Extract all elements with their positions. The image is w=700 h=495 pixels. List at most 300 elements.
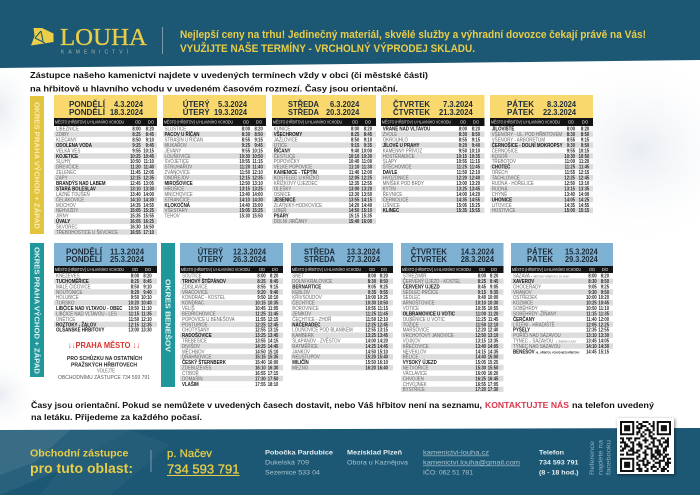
sales rep name and phone: p. Načev <box>167 448 213 460</box>
table: Pondělí 4.3. / 18.3.: 8:00 <box>132 126 141 132</box>
table: Čtvrtek 14.3. / 28.3.: NETVOŘICE <box>403 363 429 372</box>
table: Úterý 5.3. / 19.3.: MĚSTO (HŘBITOV) U HLAVNÍHO VCHODU <box>164 120 233 124</box>
table: Středa 13.3. / 27.3.: KAMBERK <box>292 333 315 339</box>
table: Středa 13.3. / 27.3.: LOUŇOVICE POD BLANÍKEM <box>292 326 353 334</box>
table: Čtvrtek 14.3. / 28.3.: 16:25 <box>475 376 486 381</box>
table: Pátek 15.3. / 29.3.: 12:05 <box>586 322 597 327</box>
table: Úterý 5.3. / 19.3.: TEHOV <box>164 213 180 220</box>
table: Úterý 12.3. / 26.3.: POSTUPICE <box>182 322 208 328</box>
table: Středa 13.3. / 27.3. <box>291 243 393 372</box>
table: Úterý 12.3. / 26.3.: 15:10 <box>268 349 279 354</box>
table: Pátek 8.3. / 22.3.: MĚSTO (HŘBITOV) U HLAVNÍHO VCHODU <box>491 120 560 124</box>
table: Středa 6.3. / 20.3.: 13:55 <box>349 197 360 202</box>
table: Pátek 15.3. / 29.3.: 14:10 <box>586 344 597 349</box>
table: Pondělí 11.3. / 25.3.: 11:50 <box>129 316 139 322</box>
table: Úterý 5.3. / 19.3.: ÚTERÝ <box>183 108 210 117</box>
table: Středa 13.3. / 27.3.: 11:25 <box>366 311 376 317</box>
table: Čtvrtek 14.3. / 28.3.: ARNOŠTOVICE <box>403 299 435 307</box>
table: Pondělí 4.3. / 18.3.: 9:55 <box>132 148 141 153</box>
table: Úterý 12.3. / 26.3.: 8:00 <box>257 273 266 279</box>
table: Úterý 12.3. / 26.3.: 15:35 <box>268 354 279 360</box>
table: Úterý 12.3. / 26.3.: 16:55 <box>255 371 266 376</box>
table: Pondělí 4.3. / 18.3.: ČELÁKOVICE <box>56 196 85 204</box>
table: Pondělí 11.3. / 25.3.: 12:10 <box>141 316 152 322</box>
table: Středa 13.3. / 27.3.: 8:00 <box>368 273 376 279</box>
table: Úterý 5.3. / 19.3.: 13:40 <box>239 191 250 197</box>
table: Úterý 12.3. / 26.3.: DIVIŠOV <box>182 342 201 350</box>
table: Středa 13.3. / 27.3.: 12:55 <box>365 327 376 333</box>
table: Středa 13.3. / 27.3.: 10:00 <box>365 295 376 300</box>
table: Pátek 8.3. / 22.3.: CHÝNĚ <box>492 189 508 198</box>
table: Čtvrtek 7.3. / 21.3.: ČTVRTEK <box>393 108 430 117</box>
table: Čtvrtek 14.3. / 28.3.: 11:20 <box>488 311 499 317</box>
table: Pátek 15.3. / 29.3.: 15:15 <box>598 349 609 354</box>
table: Čtvrtek 7.3. / 21.3.: JÍLOVÉ U PRAHY <box>383 140 420 149</box>
table: Čtvrtek 14.3. / 28.3.: 15:50 <box>488 365 499 371</box>
table: Středa 6.3. / 20.3.: ŘÍČANY <box>274 146 291 155</box>
table: Čtvrtek 14.3. / 28.3.: 16:20 <box>488 371 499 376</box>
table: Pátek 8.3. / 22.3.: 11:25 <box>565 164 575 170</box>
table: Čtvrtek 14.3. / 28.3.: 10:55 <box>488 306 499 311</box>
table: Pondělí 11.3. / 25.3.: 13:30 <box>141 327 152 333</box>
table: Čtvrtek 7.3. / 21.3.: ČERNOLICE <box>383 196 409 204</box>
table: Pátek 8.3. / 22.3.: 13:15 <box>564 186 575 192</box>
table: Pondělí 4.3. / 18.3.: 9:45 <box>146 143 154 148</box>
table: Pondělí 11.3. / 25.3.: 11:15 <box>129 311 139 317</box>
table: Středa 6.3. / 20.3.: 20.3.2024 <box>326 108 360 117</box>
table: Úterý 5.3. / 19.3.: 15:00 <box>252 202 263 208</box>
table: Pátek 15.3. / 29.3.: TÝNEC NAD SÁZAVOU <box>513 342 561 350</box>
table: Pondělí 4.3. / 18.3.: DO <box>148 120 155 124</box>
table: Pondělí 11.3. / 25.3.: 8:20 <box>143 273 152 279</box>
header slogan: Nejlepší ceny na trhu! Jedinečný materiál, skvělé služby a výhradní dovozce čekají právě na Vás! <box>180 29 646 41</box>
table: Čtvrtek 14.3. / 28.3.: 12:10 <box>488 322 499 327</box>
intro text: na hřbitově u hlavního vchodu v uvedeném časovém rozmezí. Časy jsou orientační. <box>30 82 398 94</box>
table: Pátek 15.3. / 29.3.: XAVEROV <box>513 279 535 285</box>
table: Středa 6.3. / 20.3.: 10:40 <box>349 159 360 164</box>
table: Středa 6.3. / 20.3.: STŘEDA <box>288 100 319 109</box>
table: Úterý 12.3. / 26.3.: 17:15 <box>268 371 279 376</box>
table: Pondělí 4.3. / 18.3.: 15:55 <box>143 213 154 219</box>
table: Pátek 15.3. / 29.3.: PÁTEK <box>527 255 553 264</box>
table: Čtvrtek 7.3. / 21.3.: OKROUHLO <box>383 137 408 144</box>
table: Středa 13.3. / 27.3.: 10:30 <box>365 300 376 306</box>
table: Čtvrtek 14.3. / 28.3.: 28.3.2024 <box>461 255 495 264</box>
table: Pondělí 4.3. / 18.3.: 13:40 <box>130 191 141 197</box>
table: Středa 13.3. / 27.3.: JENÍKOV <box>292 310 312 318</box>
table: Úterý 12.3. / 26.3.: 14:15 <box>268 338 279 344</box>
table: Úterý 5.3. / 19.3.: 11:50 <box>240 170 250 175</box>
table: Úterý 12.3. / 26.3.: ČESKÝ ŠTERNBERK <box>182 358 226 366</box>
table: Čtvrtek 7.3. / 21.3.: 15:55 <box>469 208 480 213</box>
table: Pondělí 4.3. / 18.3.: 9:25 <box>132 143 141 148</box>
table: Středa 13.3. / 27.3.: MĚSTO (HŘBITOV) U HLAVNÍHO VCHODU <box>292 267 361 272</box>
table: Středa 13.3. / 27.3.: 15:50 <box>365 360 376 365</box>
table: Pátek 8.3. / 22.3.: TACHLOVICE <box>492 175 520 182</box>
table: Pátek 15.3. / 29.3.: 12:25 <box>598 322 609 327</box>
table: Pondělí 4.3. / 18.3.: KOJETICE <box>56 153 79 160</box>
table: Čtvrtek 14.3. / 28.3.: SEDLEC <box>403 295 421 301</box>
table: Čtvrtek 7.3. / 21.3.: 15:25 <box>469 202 480 208</box>
table: Pátek 8.3. / 22.3.: 8:55 <box>567 137 575 143</box>
notice: Praha město: VOLEJTE <box>97 368 115 374</box>
table: Čtvrtek 14.3. / 28.3.: 8:00 <box>478 273 486 279</box>
table: Pondělí 11.3. / 25.3.: 9:10 <box>143 284 152 290</box>
side tab: Okres Praha východ + západ (yellow) <box>30 96 44 234</box>
table: Pátek 15.3. / 29.3.: SÁZAVA - MĚSTSKÝ HŘBITOV U SV. ANNY <box>513 274 570 280</box>
table: Čtvrtek 14.3. / 28.3.: VOTICE <box>403 306 420 312</box>
table: Středa 13.3. / 27.3.: 14:20 <box>377 338 388 344</box>
table: Čtvrtek 7.3. / 21.3.: 15:35 <box>456 208 467 213</box>
table: Úterý 12.3. / 26.3.: ZDEBUZEVES <box>182 365 212 372</box>
table: Čtvrtek 7.3. / 21.3.: 9:50 <box>459 148 467 153</box>
branch Pardubice: Dukelská 709 <box>265 460 309 466</box>
closing note: na letáku. Přijedeme za každého počasí. <box>31 412 202 422</box>
table: Pátek 8.3. / 22.3.: 11:20 <box>579 159 590 164</box>
table: Středa 6.3. / 20.3.: 8:45 <box>364 132 372 137</box>
table: Čtvrtek 14.3. / 28.3.: 9:35 <box>490 289 499 295</box>
logo: Louha kamenictví <box>31 24 147 56</box>
table: Úterý 12.3. / 26.3.: 17:30 <box>255 376 266 381</box>
notice: Praha město: PRAŽSKÝCH HŘBITOVECH <box>71 360 137 368</box>
table: Pondělí 11.3. / 25.3. <box>54 243 157 334</box>
table: Úterý 5.3. / 19.3.: 15:50 <box>252 213 263 219</box>
table: Pátek 8.3. / 22.3.: VŠENORY - UL. POD HŘBITOVEM <box>492 129 562 138</box>
table: Čtvrtek 7.3. / 21.3.: KLINEC <box>383 208 400 214</box>
table: Úterý 12.3. / 26.3.: 8:25 <box>257 279 266 284</box>
table: Úterý 5.3. / 19.3.: 10:50 <box>252 153 263 159</box>
table: Čtvrtek 14.3. / 28.3.: VÁCLAVICE <box>403 370 428 377</box>
table: Úterý 12.3. / 26.3.: 26.3.2024 <box>233 255 267 264</box>
table: Úterý 12.3. / 26.3.: 17:55 <box>255 381 266 387</box>
table: Pátek 8.3. / 22.3.: VŠENORY - ARBORETUM <box>492 136 545 144</box>
table: Pátek 8.3. / 22.3.: 12:15 <box>579 170 590 175</box>
wordmark: LOUHA <box>60 24 147 51</box>
table: Pondělí 4.3. / 18.3.: STARÁ BOLESLAV <box>56 185 96 193</box>
table: Úterý 5.3. / 19.3.: 8:00 <box>242 126 250 132</box>
table: Pátek 15.3. / 29.3.: 10:45 <box>598 300 609 306</box>
table: Pátek 15.3. / 29.3.: 8:00 <box>588 273 597 279</box>
table: Středa 6.3. / 20.3.: MĚSTO (HŘBITOV) U HLAVNÍHO VCHODU <box>273 120 342 124</box>
table: Středa 6.3. / 20.3.: 11:10 <box>349 164 360 170</box>
table: Pondělí 4.3. / 18.3.: 14:30 <box>143 197 154 202</box>
table: Pondělí 4.3. / 18.3.: 17:10 <box>143 230 154 235</box>
table: Čtvrtek 7.3. / 21.3.: 8:55 <box>459 137 467 143</box>
table: Čtvrtek 7.3. / 21.3.: ŘEVNICE <box>383 189 403 198</box>
table: Pátek 15.3. / 29.3.: VRANOV <box>513 289 532 296</box>
table: Pondělí 11.3. / 25.3.: TURSKO <box>56 300 75 307</box>
table: Středa 13.3. / 27.3.: RATMĚŘICE <box>292 341 319 350</box>
table: Pátek 8.3. / 22.3.: ČERNOŠICE <box>492 147 519 155</box>
table: Pondělí 4.3. / 18.3.: 12:15 <box>130 175 141 181</box>
table: Pátek 8.3. / 22.3.: 9:15 <box>581 137 590 143</box>
table: Středa 6.3. / 20.3.: OLEŠKY <box>274 185 292 193</box>
table: Pátek 15.3. / 29.3.: 14:30 <box>598 344 609 349</box>
table: Úterý 5.3. / 19.3.: 11:15 <box>252 159 263 164</box>
table: Pondělí 11.3. / 25.3.: 13:00 <box>128 327 139 333</box>
table: Středa 6.3. / 20.3.: DOLNÍ JIRČANY <box>274 218 308 225</box>
table: Čtvrtek 14.3. / 28.3.: 10:30 <box>488 300 499 306</box>
table: Čtvrtek 7.3. / 21.3.: 11:50 <box>457 170 467 175</box>
table: Pondělí 4.3. / 18.3.: 12:45 <box>130 181 141 186</box>
table: Úterý 5.3. / 19.3.: 14:10 <box>239 197 250 202</box>
rotated note: references on facebook: Reference <box>589 441 596 475</box>
table: Čtvrtek 14.3. / 28.3.: 16:45 <box>488 376 499 381</box>
table: Pátek 8.3. / 22.3.: JÍLOVIŠTĚ <box>492 124 515 133</box>
table: Pondělí 11.3. / 25.3.: OLŠANSKÉ HŘBITOVY <box>56 325 105 334</box>
table: Pátek 15.3. / 29.3.: 13:30 <box>598 333 609 338</box>
table: Čtvrtek 14.3. / 28.3.: 11:50 <box>476 322 486 327</box>
table: Středa 13.3. / 27.3.: 13:25 <box>365 333 376 338</box>
table: Pondělí 11.3. / 25.3.: 10:10 <box>141 295 152 300</box>
side tab: Okres Praha východ + západ (yellow): OKRES PRAHA VÝCHOD + ZÁPAD <box>32 102 41 230</box>
table: Úterý 5.3. / 19.3.: 5.3.2024 <box>218 100 248 109</box>
table: Pondělí 4.3. / 18.3.: ZELENEC <box>56 170 77 176</box>
table: Pondělí 4.3. / 18.3.: 10:25 <box>130 153 141 159</box>
table: Čtvrtek 14.3. / 28.3.: 15:25 <box>488 360 499 365</box>
table: Středa 13.3. / 27.3.: 9:25 <box>380 284 388 290</box>
table: Pondělí 4.3. / 18.3.: NEHVIZDY <box>56 208 79 214</box>
table: Pátek 15.3. / 29.3.: 11:15 <box>586 311 597 317</box>
table: Úterý 5.3. / 19.3.: SVOJETICE <box>164 159 190 165</box>
table: Pondělí 4.3. / 18.3.: ÚVALY <box>56 218 71 225</box>
table: Úterý 5.3. / 19.3.: 12:50 <box>239 181 250 186</box>
table: Čtvrtek 7.3. / 21.3.: MNÍŠEK POD BRDY <box>383 180 425 187</box>
table: Úterý 5.3. / 19.3.: DO <box>256 120 263 124</box>
table: Středa 13.3. / 27.3.: MILIČÍN <box>292 358 309 366</box>
table: Pátek 15.3. / 29.3.: SOBĚHRDY -ŽÍŇANY <box>513 309 557 318</box>
table: Úterý 5.3. / 19.3.: 13:10 <box>252 181 263 186</box>
table: Pátek 8.3. / 22.3.: 11:55 <box>565 170 575 175</box>
table: Úterý 5.3. / 19.3.: VŠESTARY <box>164 207 188 214</box>
table: Středa 6.3. / 20.3.: OTICE <box>274 143 288 149</box>
table: Úterý 5.3. / 19.3.: 15:05 <box>239 208 250 213</box>
table: Úterý 5.3. / 19.3.: 14:30 <box>252 197 263 202</box>
table: Čtvrtek 14.3. / 28.3.: ČERVENÝ ÚJEZD <box>403 283 440 291</box>
table: Pátek 8.3. / 22.3.: 22.3.2024 <box>543 108 577 117</box>
table: Úterý 12.3. / 26.3.: ZDISLAVICE <box>182 284 208 291</box>
table: Úterý 12.3. / 26.3.: 13:15 <box>268 327 279 333</box>
table: Pátek 8.3. / 22.3.: 8:30 <box>567 132 575 137</box>
table: Úterý 12.3. / 26.3.: 16:10 <box>255 365 266 371</box>
table: Čtvrtek 14.3. / 28.3.: 11:45 <box>488 316 499 322</box>
sales rep label <box>30 448 133 476</box>
table: Čtvrtek 14.3. / 28.3.: 16:00 <box>475 371 486 376</box>
table: Pondělí 11.3. / 25.3.: TUCHOMĚŘICE <box>56 276 89 285</box>
table: Středa 6.3. / 20.3.: 12:35 <box>349 181 360 186</box>
table: Pondělí 11.3. / 25.3.: 10:20 <box>128 300 139 306</box>
table: Středa 6.3. / 20.3.: PSÁRY <box>274 212 289 220</box>
table: Středa 6.3. / 20.3.: 8:50 <box>351 137 360 143</box>
table: Čtvrtek 14.3. / 28.3.: ČTVRTEK <box>411 248 447 257</box>
table: Středa 6.3. / 20.3.: 12:55 <box>361 181 372 186</box>
table: Středa 13.3. / 27.3.: DO <box>381 267 388 272</box>
table: Úterý 12.3. / 26.3.: 14:25 <box>255 344 266 349</box>
table: Středa 13.3. / 27.3.: ČECHTICE <box>292 299 316 307</box>
table: Pondělí 4.3. / 18.3.: 16:25 <box>143 219 154 224</box>
table: Pátek 8.3. / 22.3.: 8.3.2024 <box>547 100 577 109</box>
table: Středa 6.3. / 20.3. <box>272 95 376 225</box>
table: Středa 6.3. / 20.3.: 6.3.2024 <box>330 100 360 109</box>
side tab: Okres Benešov <box>161 243 175 387</box>
table: Pátek 8.3. / 22.3.: OŘECH <box>492 168 508 176</box>
table: Úterý 12.3. / 26.3.: TRHOVÝ ŠTĚPÁNOV <box>182 276 227 285</box>
table: Pátek 15.3. / 29.3.: 11:10 <box>599 306 609 311</box>
branch Pardubice <box>265 450 333 476</box>
web and email: IČO: 062 51 781 <box>423 468 473 476</box>
table: Pátek 8.3. / 22.3.: ČERNOŠICE - DOLNÍ MOKROPSY <box>492 140 563 149</box>
table: Čtvrtek 7.3. / 21.3.: LIŠNICE <box>383 201 401 209</box>
table: Pondělí 4.3. / 18.3.: VELKÁ VES <box>56 147 81 155</box>
table: Úterý 12.3. / 26.3.: 13:55 <box>255 338 266 344</box>
table: Pondělí 4.3. / 18.3.: 18.3.2024 <box>110 108 144 117</box>
table: Úterý 12.3. / 26.3.: 12:15 <box>268 316 279 322</box>
table: Čtvrtek 7.3. / 21.3.: SLAPY <box>383 159 398 165</box>
table: Středa 13.3. / 27.3.: 12:10 <box>377 316 388 322</box>
table: Úterý 5.3. / 19.3.: 13:25 <box>252 186 263 192</box>
table: Čtvrtek 7.3. / 21.3.: HOSTĚRADICE <box>383 151 415 160</box>
table: Čtvrtek 7.3. / 21.3.: 14:00 <box>456 191 467 197</box>
table: Čtvrtek 14.3. / 28.3.: OLBRAMOVICE U VOTIC <box>403 311 455 318</box>
table: Čtvrtek 14.3. / 28.3.: 9:15 <box>478 289 486 295</box>
table: Čtvrtek 14.3. / 28.3.: VOJKOV <box>403 338 421 345</box>
warehouse Plzeň: Mezisklad Plzeň <box>347 450 402 456</box>
table: Středa 6.3. / 20.3.: POPOVIČKY <box>274 158 300 165</box>
table: Čtvrtek 14.3. / 28.3.: MARŠOVICE <box>403 326 430 334</box>
table: Pátek 15.3. / 29.3.: 9:30 <box>588 289 597 295</box>
table: Středa 13.3. / 27.3.: OD <box>369 267 375 272</box>
header band <box>0 0 700 68</box>
table: Pondělí 4.3. / 18.3.: 8:25 <box>132 132 141 137</box>
table: Středa 6.3. / 20.3.: 8:00 <box>351 126 360 132</box>
table: Úterý 5.3. / 19.3.: ZVÁNOVICE <box>164 169 191 176</box>
table: Středa 13.3. / 27.3.: 16:40 <box>377 365 388 371</box>
table: Čtvrtek 14.3. / 28.3.: 9:40 <box>478 295 486 300</box>
table: Středa 6.3. / 20.3.: KŘÍŽKOVÝ ÚJEZDEC <box>274 178 318 187</box>
table: Čtvrtek 14.3. / 28.3.: ČTVRTEK <box>411 255 447 264</box>
icon: stone logo mark <box>31 28 54 46</box>
phone block <box>539 450 579 476</box>
table: Středa 6.3. / 20.3.: 9:10 <box>364 137 372 143</box>
table: Úterý 5.3. / 19.3.: 10:30 <box>239 153 250 159</box>
table: Pátek 8.3. / 22.3.: 10:30 <box>564 153 575 159</box>
table: Čtvrtek 14.3. / 28.3.: VRCHOTOVY JANOVICE <box>403 333 454 339</box>
table: Středa 13.3. / 27.3.: 11:45 <box>378 311 388 317</box>
table: Čtvrtek 14.3. / 28.3.: 13:40 <box>475 344 486 349</box>
table: Pondělí 4.3. / 18.3.: DŘEVČICE <box>56 162 79 171</box>
table: Čtvrtek 7.3. / 21.3.: 10:35 <box>469 153 480 159</box>
table: Pondělí 11.3. / 25.3.: MĚSTO (HŘBITOV) U HLAVNÍHO VCHODU <box>55 267 124 272</box>
table: Úterý 12.3. / 26.3.: MĚSTO (HŘBITOV) U HLAVNÍHO VCHODU <box>181 267 250 272</box>
phone block: 734 593 791 <box>539 460 579 466</box>
table: Pátek 8.3. / 22.3.: 9:55 <box>567 148 575 153</box>
table: Úterý 12.3. / 26.3.: VLAŠIM <box>182 379 199 388</box>
table: Pátek 8.3. / 22.3.: 14:35 <box>564 202 575 208</box>
table: Středa 6.3. / 20.3.: 8:25 <box>351 132 360 137</box>
table: Úterý 12.3. / 26.3.: 16:00 <box>268 360 279 365</box>
table: Čtvrtek 14.3. / 28.3.: 9:05 <box>490 284 499 290</box>
table: Středa 6.3. / 20.3.: 8:20 <box>364 126 372 132</box>
table: Čtvrtek 14.3. / 28.3.: 14:15 <box>475 349 486 354</box>
table: Pondělí 11.3. / 25.3.: 11:10 <box>141 306 152 311</box>
table: Středa 13.3. / 27.3.: 14:00 <box>365 338 376 344</box>
table: Pátek 8.3. / 22.3.: 10:50 <box>579 153 590 159</box>
table: Úterý 5.3. / 19.3.: OD <box>243 120 249 124</box>
table: Středa 13.3. / 27.3.: 16:10 <box>377 360 388 365</box>
table: Středa 13.3. / 27.3.: 9:05 <box>368 284 376 290</box>
table: Pondělí 11.3. / 25.3.: HOLUBICE <box>56 295 79 301</box>
table: Úterý 12.3. / 26.3.: 8:45 <box>270 279 279 284</box>
table: Středa 6.3. / 20.3.: OD <box>352 120 358 124</box>
table: Středa 13.3. / 27.3.: NEUSTUPOV <box>292 354 320 361</box>
rotated note: references on facebook <box>589 440 612 475</box>
table: Pondělí 11.3. / 25.3.: 10:40 <box>141 300 152 306</box>
table: Čtvrtek 14.3. / 28.3.: 10:00 <box>488 295 499 300</box>
table: Úterý 12.3. / 26.3.: 11:45 <box>268 311 279 317</box>
table: Středa 6.3. / 20.3.: 15:35 <box>361 213 372 219</box>
table: Čtvrtek 7.3. / 21.3.: 21.3.2024 <box>439 108 473 117</box>
table: Pondělí 4.3. / 18.3.: 13:10 <box>130 186 141 192</box>
table: Čtvrtek 14.3. / 28.3.: OD <box>479 267 485 272</box>
table: Pátek 8.3. / 22.3.: 14:00 <box>579 191 590 197</box>
table: Čtvrtek 14.3. / 28.3. <box>401 243 504 393</box>
table: Úterý 12.3. / 26.3.: 10:10 <box>268 295 279 300</box>
table: Úterý 12.3. / 26.3.: VRACOVICE <box>182 289 209 296</box>
table: Pátek 8.3. / 22.3.: 9:50 <box>581 143 590 148</box>
table: Čtvrtek 14.3. / 28.3.: BĚLICE <box>403 352 419 361</box>
table: Pátek 15.3. / 29.3.: OD <box>589 267 595 272</box>
table: Pátek 8.3. / 22.3.: CHOTEČ <box>492 163 511 171</box>
table: Pátek 15.3. / 29.3.: BENEŠOV HL. HŘBITOV, VCHOD MEZI HŘBITOVY <box>513 350 580 356</box>
notice: Praha město: PRO SCHŮZKU NA OSTATNÍCH <box>67 354 142 362</box>
table: Pondělí 4.3. / 18.3.: JIRNY <box>56 213 69 220</box>
table: Pondělí 11.3. / 25.3.: NOUTONICE <box>56 289 83 296</box>
table: Čtvrtek 7.3. / 21.3.: MĚSTO (HŘBITOV) U HLAVNÍHO VCHODU <box>382 120 451 124</box>
table: Úterý 12.3. / 26.3.: 9:20 <box>257 289 266 295</box>
table: Čtvrtek 7.3. / 21.3.: 11:25 <box>457 164 467 170</box>
table: Čtvrtek 7.3. / 21.3.: 15:05 <box>456 202 467 208</box>
table: Středa 13.3. / 27.3.: 14:50 <box>365 349 376 354</box>
table: Pátek 15.3. / 29.3.: 12:00 <box>598 316 609 322</box>
table: Pátek 15.3. / 29.3.: 9:05 <box>588 284 597 290</box>
table: Úterý 5.3. / 19.3.: 9:15 <box>255 137 263 143</box>
notice: Praha město <box>58 339 150 381</box>
table: Pátek 8.3. / 22.3.: 15:00 <box>564 208 575 213</box>
intro text <box>30 70 428 94</box>
table: Úterý 12.3. / 26.3.: MĚCHNOV <box>182 347 205 356</box>
table: Pátek 15.3. / 29.3.: 9:25 <box>601 284 609 290</box>
table: Středa 6.3. / 20.3.: VELKÉ POPOVICE <box>274 163 313 171</box>
table: Čtvrtek 7.3. / 21.3.: 14:20 <box>469 191 480 197</box>
table: Čtvrtek 14.3. / 28.3.: KŘEČOVICE <box>403 341 429 350</box>
table: Čtvrtek 14.3. / 28.3.: 17:20 <box>475 387 486 392</box>
table: Čtvrtek 14.3. / 28.3.: SEDLEC PRČICE <box>403 288 439 296</box>
table: Úterý 12.3. / 26.3.: 14:45 <box>268 344 279 349</box>
table: Úterý 12.3. / 26.3.: 12.3.2024 <box>233 248 267 257</box>
table: Úterý 5.3. / 19.3.: MUKAŘOV <box>164 140 187 149</box>
table: Pondělí 4.3. / 18.3.: 10:15 <box>143 148 154 153</box>
table: Úterý 5.3. / 19.3.: 9:25 <box>242 143 250 148</box>
table: Pátek 8.3. / 22.3.: RUDNÁ <box>492 185 508 193</box>
table: Pátek 15.3. / 29.3.: TÝNEC n. SÁZAVOU - L. ŠIMONA A JUDY <box>513 339 576 345</box>
notice: Praha město: OBCHODNÍMU ZÁSTUPCE 734 593 791 <box>58 374 150 381</box>
table: Středa 13.3. / 27.3.: STŘEDA <box>304 255 335 264</box>
table: Pondělí 4.3. / 18.3.: 13:30 <box>143 186 154 192</box>
side tab: Okres Praha východ + západ (teal) <box>30 243 44 377</box>
table: Pátek 8.3. / 22.3.: 11:45 <box>579 164 590 170</box>
table: Čtvrtek 14.3. / 28.3.: ČERVENÝ ÚJEZD - KOSTEL <box>403 278 461 285</box>
table: Pondělí 4.3. / 18.3. <box>54 95 157 236</box>
